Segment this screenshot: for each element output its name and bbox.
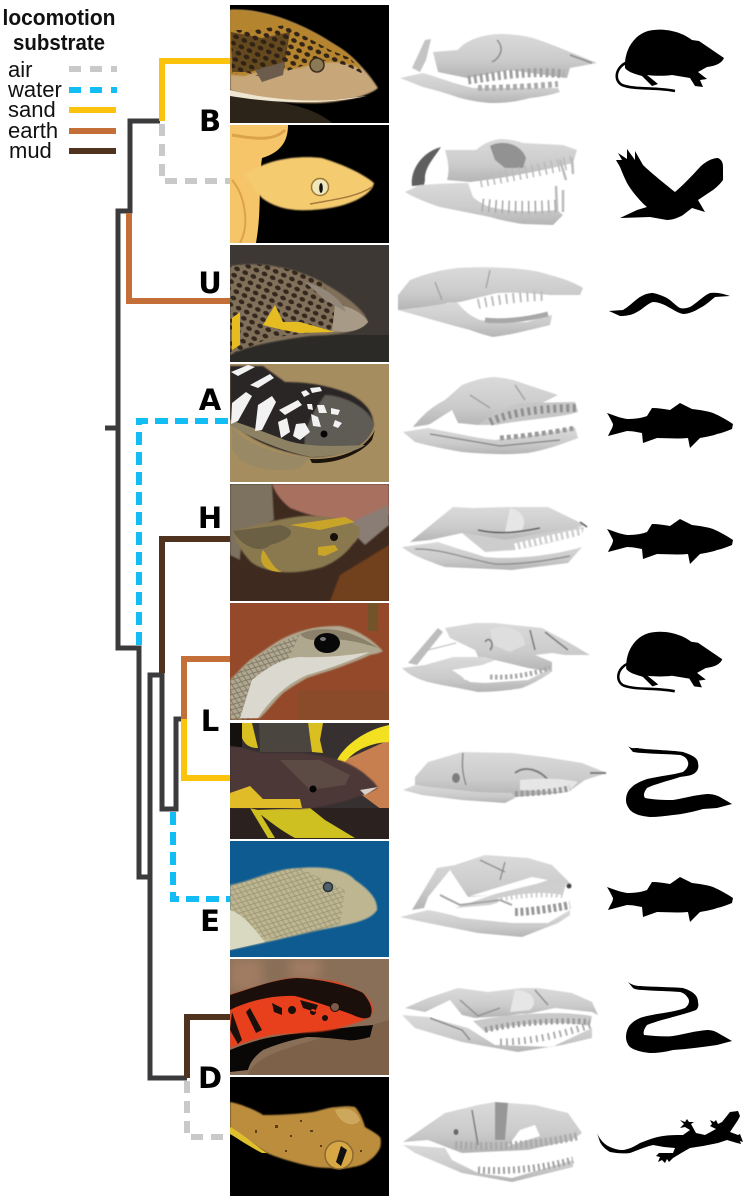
legend labels: mud xyxy=(9,138,52,163)
silhouette: rodent L xyxy=(618,632,722,691)
legend labels: water xyxy=(7,77,62,102)
silhouette: bird xyxy=(616,149,723,220)
photo: shield-tail snake U xyxy=(230,245,389,362)
photo: ringed snake L xyxy=(230,723,389,839)
skull 6 xyxy=(402,623,590,692)
legend: locomotion substrate xyxy=(2,5,117,163)
legend title: locomotion xyxy=(2,5,116,30)
silhouette: eel L xyxy=(626,746,732,817)
photo: mud snake H xyxy=(230,484,389,601)
skull 2 xyxy=(405,139,577,225)
legend labels: earth xyxy=(8,118,58,143)
legend line keys xyxy=(69,69,117,151)
legend labels: air xyxy=(8,57,32,82)
photo: tree snake D xyxy=(230,1077,389,1196)
air branches xyxy=(162,124,230,1137)
clade letters xyxy=(198,104,222,1095)
skull 3 xyxy=(398,267,583,337)
clade letters: U xyxy=(198,266,222,300)
photo: pale water snake E xyxy=(230,841,389,957)
clade letters: D xyxy=(198,1061,222,1095)
photo: sand snake B xyxy=(230,5,389,123)
water branches xyxy=(139,421,230,899)
clade letters: H xyxy=(198,501,222,535)
mud branches xyxy=(162,539,230,1078)
legend title xyxy=(2,5,116,55)
clade letters: B xyxy=(199,104,221,138)
photo: banded water snake A xyxy=(230,364,389,482)
silhouette: rodent xyxy=(617,30,724,91)
photo: red and black snake D xyxy=(230,959,389,1075)
silhouette: fish E xyxy=(607,877,733,922)
phylogenetic tree xyxy=(105,61,230,1137)
earth branches xyxy=(129,213,230,719)
legend labels xyxy=(7,57,62,163)
silhouette: fish H xyxy=(607,519,733,564)
silhouette: worm xyxy=(609,293,730,316)
skull 9 xyxy=(402,988,598,1052)
skull 7 xyxy=(403,752,607,803)
clade letters: L xyxy=(201,704,219,738)
silhouette: eel D xyxy=(626,982,732,1053)
skull 1 xyxy=(400,34,597,103)
legend labels: sand xyxy=(8,97,56,122)
silhouette: fish A xyxy=(607,403,733,448)
legend title: substrate xyxy=(13,30,105,55)
skull 4 xyxy=(403,377,578,454)
skull 5 xyxy=(402,507,587,570)
silhouette: lizard xyxy=(597,1111,743,1163)
sand branches xyxy=(162,61,230,778)
skull 8 xyxy=(400,855,572,937)
photo: grey earth snake L xyxy=(230,603,389,720)
tree backbone xyxy=(105,121,187,1078)
clade letters: A xyxy=(199,383,222,417)
skull 10 xyxy=(403,1102,582,1182)
photo: yellow snake B xyxy=(230,125,389,243)
clade letters: E xyxy=(200,904,220,938)
